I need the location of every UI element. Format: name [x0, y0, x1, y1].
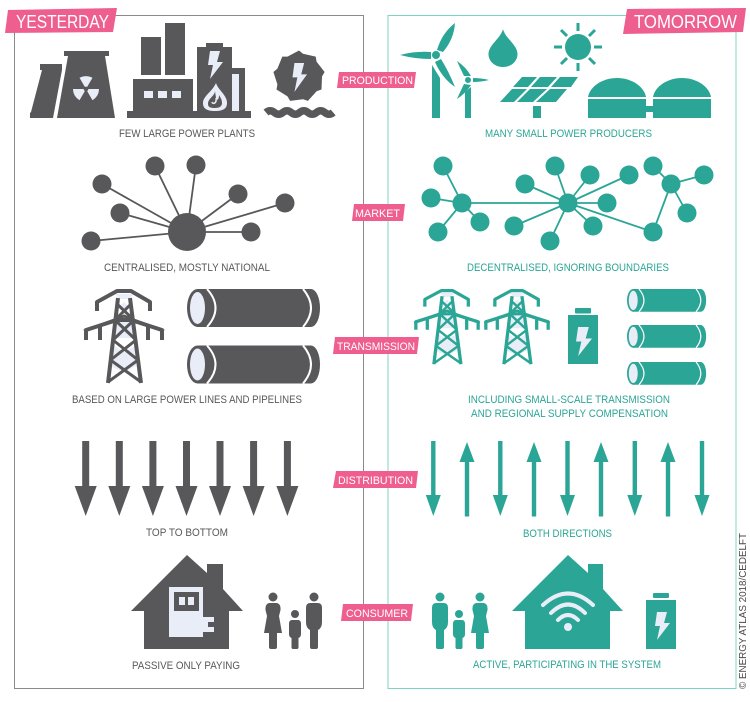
icon: water drop — [488, 29, 518, 67]
tag: production: PRODUCTION — [342, 75, 413, 87]
caption: including small-scale transmission: AND REGIONAL SUPPLY COMPENSATION — [471, 408, 668, 420]
panel: tomorrow — [388, 16, 736, 688]
arrows: both directions — [426, 441, 710, 516]
heading: yesterday: YESTERDAY — [16, 12, 109, 32]
chart: decentralised network — [422, 156, 714, 250]
icon: hydro power — [266, 50, 333, 114]
icon: fossil power plant — [127, 23, 251, 118]
chart: centralised network — [82, 156, 294, 251]
caption: few large power plants: FEW LARGE POWER PLANTS — [119, 128, 255, 140]
arrows: top to bottom — [75, 441, 298, 516]
heading: tomorrow — [623, 8, 746, 34]
icon: pipelines large — [187, 289, 320, 384]
caption: decentralised: DECENTRALISED, IGNORING BOUNDARIES — [467, 262, 669, 274]
icon: family — [432, 592, 489, 649]
caption: active, participating: ACTIVE, PARTICIPATING IN THE SYSTEM — [473, 659, 661, 671]
icon: battery — [568, 308, 598, 364]
heading: tomorrow: TOMORROW — [634, 12, 737, 32]
tag: consumer — [341, 604, 413, 621]
caption: centralised: CENTRALISED, MOSTLY NATIONAL — [104, 262, 270, 274]
icon: cooling towers with radiation symbol — [30, 51, 115, 118]
icon: pipelines small — [627, 289, 706, 385]
icon: family — [264, 592, 322, 649]
icon: wind turbines — [400, 23, 489, 118]
icon: biogas plant — [588, 78, 711, 118]
tag: transmission — [333, 337, 419, 354]
caption: many small power producers: MANY SMALL POWER PRODUCERS — [485, 128, 652, 140]
icon: solar panel — [500, 77, 578, 118]
caption: including small-scale transmission: INCLUDING SMALL-SCALE TRANSMISSION — [468, 394, 670, 406]
icon: house with wifi — [512, 555, 623, 649]
tag: market — [352, 204, 405, 221]
tag: distribution — [333, 471, 418, 488]
credit: © ENERGY ATLAS 2018/CEDELFT — [737, 532, 749, 689]
heading: yesterday — [5, 8, 117, 33]
caption: including small-scale transmission — [468, 394, 670, 420]
icon: pylon large — [84, 291, 164, 383]
icon: battery — [646, 593, 676, 649]
tag: distribution: DISTRIBUTION — [338, 475, 413, 487]
icon: pylons small — [414, 291, 550, 364]
panel: yesterday — [14, 16, 364, 688]
tag: transmission: TRANSMISSION — [337, 341, 415, 353]
icon: sun — [554, 23, 602, 71]
icon: house with meter — [131, 555, 243, 649]
caption: based on large power lines: BASED ON LARGE POWER LINES AND PIPELINES — [72, 394, 302, 406]
tag: consumer: CONSUMER — [346, 608, 408, 620]
tag: market: MARKET — [355, 208, 400, 220]
caption: passive only paying: PASSIVE ONLY PAYING — [132, 660, 240, 672]
caption: both directions: BOTH DIRECTIONS — [523, 528, 612, 540]
caption: top to bottom: TOP TO BOTTOM — [146, 527, 228, 539]
